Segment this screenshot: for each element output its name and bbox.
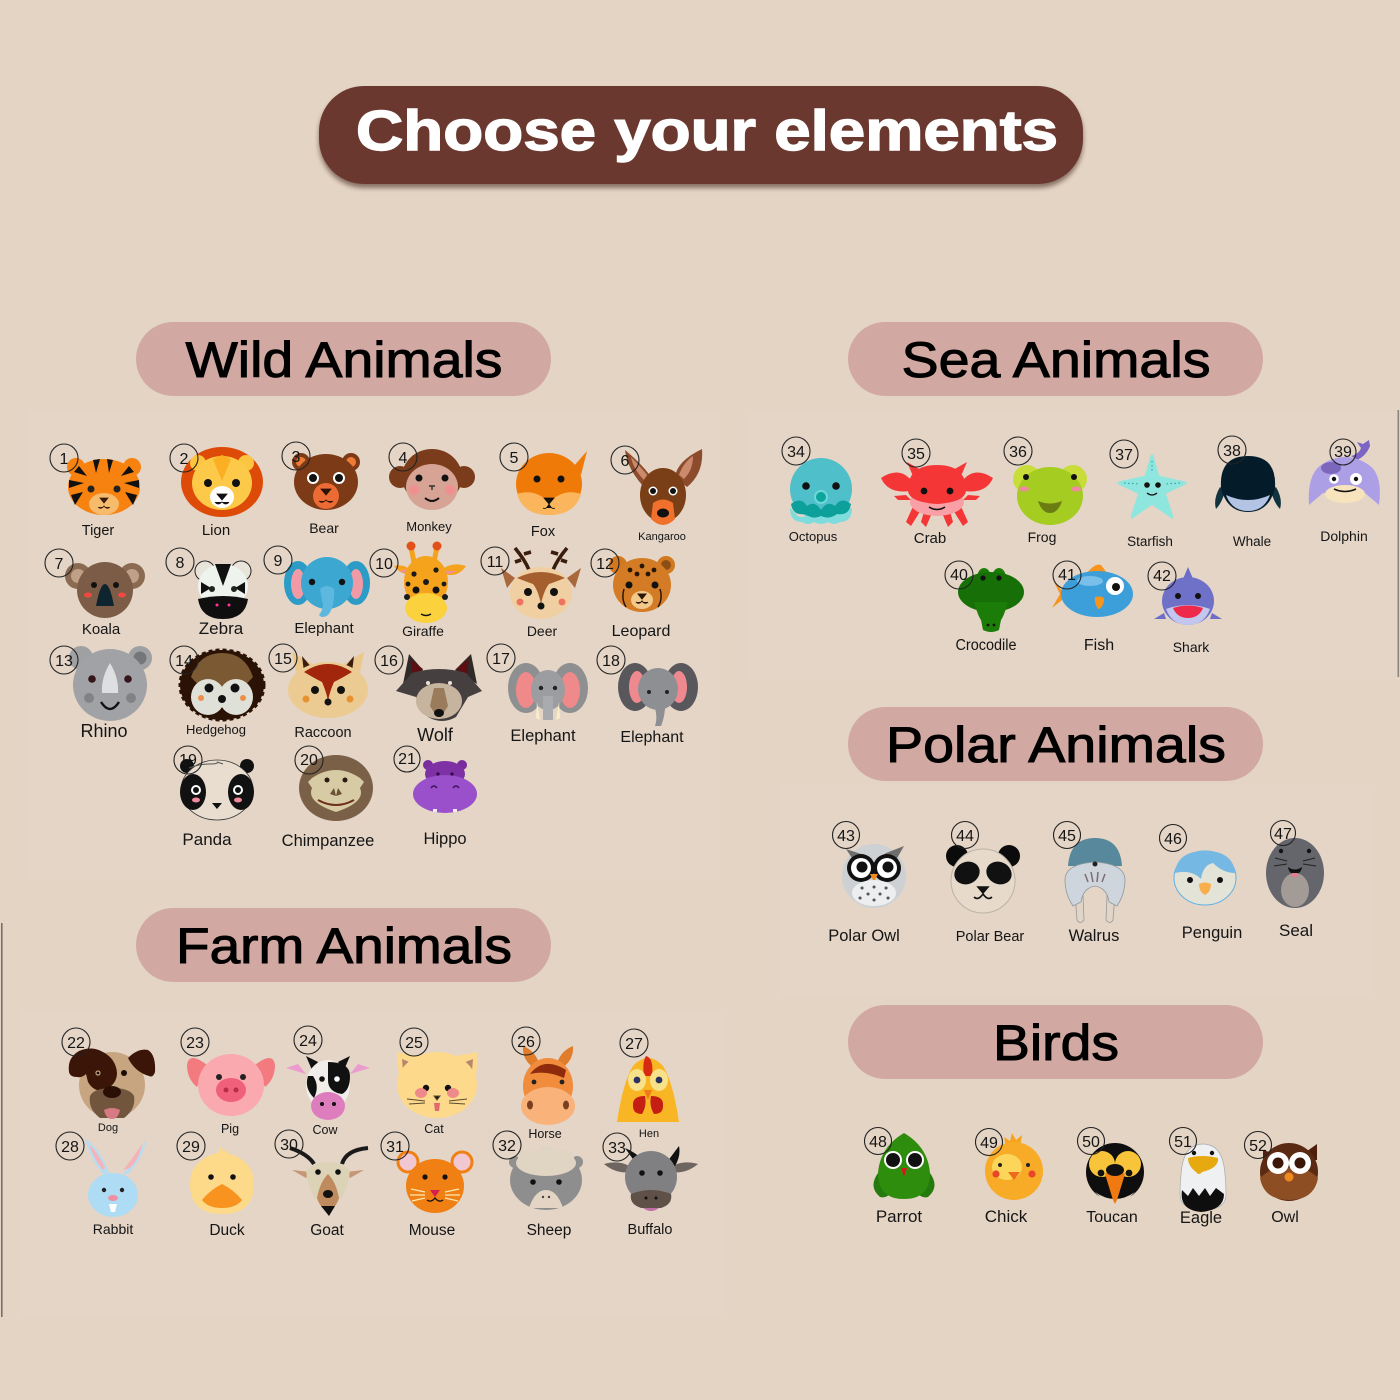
monkey: Monkey [406, 519, 452, 534]
hen [617, 1029, 679, 1140]
mouse: 31 [386, 1139, 404, 1156]
panda: 19 [179, 752, 197, 769]
starfish: 37 [1115, 447, 1133, 464]
fish: Fish [1084, 637, 1114, 654]
elephant blue [264, 546, 370, 637]
leopard: Leopard [612, 623, 670, 640]
horse [512, 1027, 575, 1141]
hippo: Hippo [423, 830, 467, 848]
toucan: Toucan [1086, 1209, 1138, 1226]
elephant grey: Elephant [510, 727, 576, 745]
octopus [782, 437, 852, 544]
penguin: Penguin [1182, 924, 1242, 942]
cow: 24 [299, 1033, 317, 1050]
elephant dark ears: Elephant [620, 729, 684, 746]
toucan: 50 [1082, 1134, 1100, 1151]
bear [282, 442, 360, 536]
panel: polar animals [828, 820, 1324, 945]
rhino: 13 [55, 653, 73, 670]
fox: Fox [531, 524, 556, 540]
elephant grey [487, 644, 588, 745]
octopus: 34 [787, 444, 805, 461]
panda: Panda [182, 830, 232, 849]
frog: 36 [1009, 444, 1027, 461]
eagle: Eagle [1180, 1209, 1222, 1227]
zebra: 8 [176, 555, 185, 572]
starfish [1110, 440, 1185, 549]
polar owl: 43 [837, 828, 855, 845]
raccoon [269, 644, 368, 741]
elephant dark ears [597, 646, 698, 746]
polar owl: Polar Owl [828, 927, 900, 945]
fish [1052, 561, 1133, 654]
raccoon: Raccoon [294, 725, 352, 741]
deer [481, 547, 581, 639]
goat: 30 [280, 1137, 298, 1154]
hedgehog: Hedgehog [186, 722, 246, 737]
title: Choose your elements [356, 99, 1058, 163]
horse: 26 [517, 1034, 535, 1051]
koala [45, 549, 145, 638]
kangaroo: Kangaroo [638, 531, 686, 543]
shark: 42 [1153, 568, 1171, 585]
mouse: Mouse [409, 1222, 455, 1239]
sheep: 32 [498, 1138, 516, 1155]
kangaroo: 6 [621, 453, 630, 470]
whale [1215, 436, 1281, 549]
giraffe [370, 542, 466, 639]
rabbit: 28 [61, 1139, 79, 1156]
octopus: Octopus [789, 529, 838, 544]
leopard: 12 [596, 556, 614, 573]
crab: 35 [907, 446, 925, 463]
rabbit: Rabbit [93, 1221, 133, 1237]
chimpanzee: 20 [300, 752, 318, 769]
heading: sea animals [848, 322, 1263, 396]
monkey: 4 [399, 450, 408, 467]
deer: Deer [527, 623, 558, 639]
zebra [166, 548, 251, 638]
giraffe: 10 [375, 556, 393, 573]
seal: 47 [1274, 826, 1292, 843]
dolphin [1309, 439, 1380, 544]
dog: Dog [98, 1122, 118, 1134]
deer: 11 [487, 554, 503, 571]
shark: Shark [1173, 639, 1210, 655]
sheep [493, 1131, 583, 1239]
buffalo: 33 [608, 1140, 626, 1157]
penguin [1160, 824, 1242, 942]
eagle: 51 [1174, 1134, 1192, 1151]
elephant blue: Elephant [294, 620, 354, 637]
heading: polar animals [848, 707, 1263, 781]
heading: farm animals: Farm Animals [176, 918, 512, 974]
duck: Duck [209, 1222, 245, 1239]
owl: Owl [1271, 1209, 1299, 1226]
crab: Crab [914, 530, 946, 547]
pig [181, 1028, 275, 1136]
raccoon: 15 [274, 651, 292, 668]
parrot: Parrot [876, 1207, 922, 1226]
rhino: Rhino [80, 721, 128, 741]
hedgehog [170, 646, 264, 737]
penguin: 46 [1164, 831, 1182, 848]
starfish: Starfish [1127, 534, 1173, 549]
zebra: Zebra [199, 619, 244, 638]
heading: wild animals [136, 322, 551, 396]
crocodile: 40 [950, 567, 968, 584]
duck: 29 [182, 1139, 200, 1156]
duck [177, 1132, 254, 1239]
tiger: 1 [60, 451, 69, 468]
bear: 3 [292, 449, 301, 466]
polar bear [946, 822, 1024, 945]
heading: wild animals: Wild Animals [186, 332, 502, 388]
parrot [864, 1128, 935, 1226]
frog [1004, 437, 1087, 545]
cat [397, 1028, 478, 1136]
monkey [389, 443, 475, 534]
elephant blue: 9 [274, 553, 283, 570]
crocodile: Crocodile [956, 637, 1016, 654]
heading: farm animals [136, 908, 551, 982]
heading: birds [848, 1005, 1263, 1079]
lion [170, 444, 263, 539]
tiger [50, 444, 141, 539]
wolf: Wolf [417, 725, 454, 745]
cow: Cow [312, 1123, 338, 1137]
elephant dark ears: 18 [602, 653, 620, 670]
heading: birds: Birds [993, 1015, 1119, 1071]
owl: 52 [1249, 1138, 1267, 1155]
koala: Koala [82, 621, 121, 638]
crab [881, 439, 993, 547]
lion: Lion [202, 522, 230, 539]
elephant grey: 17 [492, 651, 510, 668]
whale: Whale [1233, 534, 1271, 549]
hippo: 21 [398, 751, 416, 768]
hedgehog: 14 [175, 653, 193, 670]
shark [1148, 562, 1222, 655]
hippo [394, 746, 477, 848]
goat [275, 1130, 368, 1239]
owl [1244, 1132, 1318, 1226]
chick [976, 1128, 1043, 1226]
polar bear: Polar Bear [956, 929, 1024, 945]
leopard [591, 549, 675, 640]
dolphin: Dolphin [1320, 528, 1368, 544]
hen: 27 [625, 1036, 643, 1053]
frog: Frog [1028, 529, 1056, 545]
chimpanzee: Chimpanzee [282, 832, 374, 850]
panel: sea animals [782, 436, 1380, 655]
polar owl [828, 822, 906, 945]
fox: 5 [510, 450, 519, 467]
fish: 41 [1058, 567, 1076, 584]
wolf [375, 646, 482, 745]
koala: 7 [55, 556, 64, 573]
giraffe: Giraffe [402, 623, 444, 639]
crocodile [945, 561, 1024, 654]
mouse [381, 1132, 472, 1239]
heading: sea animals: Sea Animals [902, 332, 1210, 388]
panel: birds [864, 1128, 1318, 1227]
fox [500, 443, 587, 540]
panel: wild animals [45, 442, 702, 850]
kangaroo [611, 446, 702, 543]
goat: Goat [310, 1222, 344, 1239]
pig: Pig [221, 1122, 239, 1136]
cow [286, 1026, 370, 1137]
heading: polar animals: Polar Animals [886, 717, 1226, 773]
dolphin: 39 [1334, 444, 1352, 461]
hen: Hen [639, 1128, 659, 1140]
wolf: 16 [380, 653, 398, 670]
walrus: 45 [1058, 828, 1076, 845]
bear: Bear [309, 520, 339, 536]
pig: 23 [186, 1035, 204, 1052]
lion: 2 [180, 451, 189, 468]
walrus [1054, 822, 1125, 945]
sheep: Sheep [527, 1222, 571, 1239]
rabbit [56, 1132, 146, 1237]
horse: Horse [528, 1127, 562, 1141]
buffalo [603, 1133, 698, 1238]
chick: Chick [985, 1207, 1028, 1226]
cat: 25 [405, 1035, 423, 1052]
toucan [1078, 1128, 1144, 1226]
dog [62, 1028, 155, 1134]
dog: 22 [67, 1035, 85, 1052]
panel: farm animals [56, 1026, 698, 1239]
walrus: Walrus [1069, 927, 1119, 945]
tiger: Tiger [82, 523, 114, 539]
buffalo: Buffalo [628, 1222, 672, 1238]
chick: 49 [980, 1135, 998, 1152]
eagle [1170, 1128, 1226, 1227]
rhino [50, 646, 152, 741]
cat: Cat [424, 1122, 444, 1136]
panda [174, 746, 254, 849]
seal [1266, 820, 1324, 940]
title [319, 86, 1083, 184]
polar bear: 44 [956, 828, 974, 845]
whale: 38 [1223, 443, 1241, 460]
chimpanzee [282, 746, 374, 850]
seal: Seal [1279, 921, 1313, 940]
parrot: 48 [869, 1134, 887, 1151]
